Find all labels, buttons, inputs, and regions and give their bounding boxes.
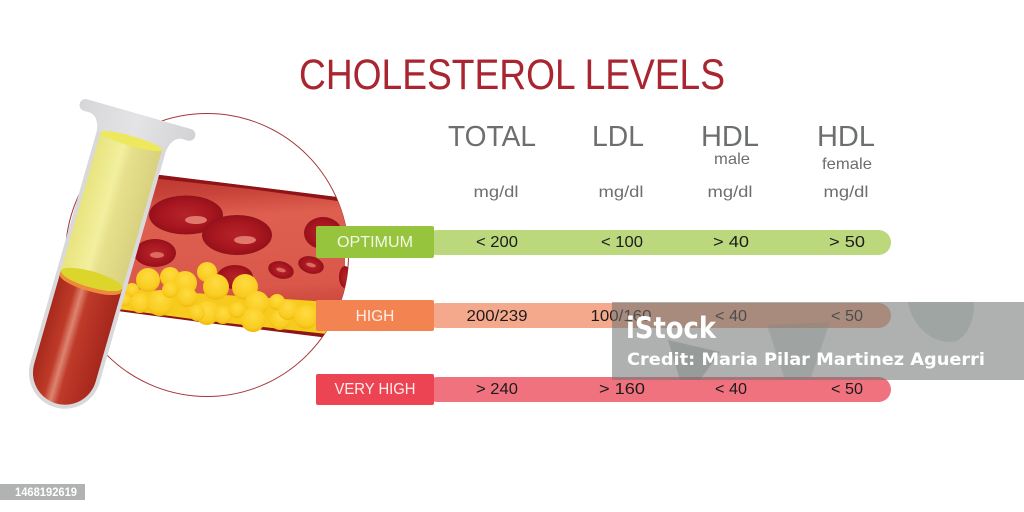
column headers: female [822,156,872,173]
column headers: HDL [701,121,759,153]
row: high: < 40 [715,308,747,325]
row: very high: > 240 [476,381,518,398]
row: optimum: < 100 [601,234,643,251]
red blood layer [25,271,122,412]
row: high: 100/160 [590,308,652,325]
label: optimum [316,226,434,258]
row: very high: < 40 [715,381,747,398]
row: optimum: < 200 [476,234,518,251]
label: optimum: OPTIMUM [337,234,413,251]
icon: test tube [0,98,197,424]
magnifier circle [66,114,348,396]
column headers [448,121,875,201]
watermark: iStock credit: Credit: Maria Pilar Martinez Aguerri [627,350,985,369]
image id tag: 1468192619 [15,485,77,499]
row: very high: < 50 [831,381,863,398]
title: CHOLESTEROL LEVELS [299,51,725,99]
row: high [316,300,891,331]
row: optimum [316,226,891,258]
column headers: LDL [592,121,644,153]
column headers: male [714,151,750,168]
column headers: mg/dl [824,184,868,201]
column headers: mg/dl [598,184,644,201]
label: very high: VERY HIGH [334,381,416,398]
row: optimum: > 40 [713,234,749,251]
column headers: HDL [817,121,875,153]
cholesterol deposits [120,262,326,334]
row: high: < 50 [831,308,863,325]
blood vessel with plaque [110,169,351,340]
row: optimum: > 50 [829,234,865,251]
label: high: HIGH [356,308,394,325]
plasma interface [59,263,125,296]
label: very high [316,374,434,405]
tube glass [20,118,170,417]
label: high [316,300,434,331]
tube rim [74,98,197,158]
row: high: 200/239 [466,308,528,325]
watermark: iStock credit [612,302,1024,380]
column headers: mg/dl [474,184,518,201]
red blood cells [134,196,351,289]
watermark: iStock credit: iStock [626,311,717,345]
row: very high [316,374,891,405]
illustration: magnified blood vessel [66,114,351,396]
yellow plasma [60,132,162,292]
image id tag [0,484,85,500]
column headers: mg/dl [708,184,752,201]
row: very high: > 160 [599,381,645,398]
column headers: TOTAL [448,121,536,153]
